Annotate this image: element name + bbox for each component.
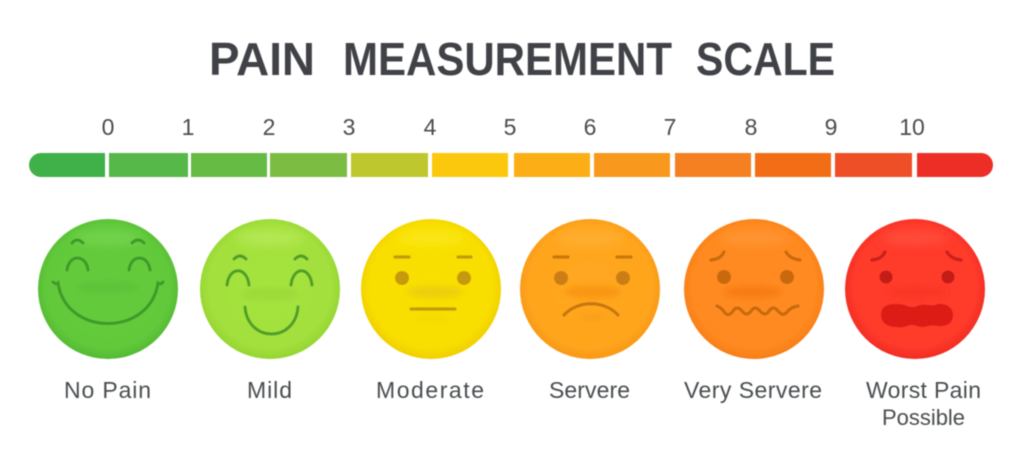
label: mild: Mild [247, 377, 292, 403]
label: no pain: No Pain [64, 377, 151, 403]
face: no pain [38, 219, 178, 359]
title: MEASUREMENT [343, 33, 672, 85]
scale numbers: 8 [745, 114, 757, 140]
face: very severe [684, 219, 824, 359]
scale numbers: 5 [504, 114, 516, 140]
label: severe: Servere [549, 377, 630, 403]
label: worst pain possible: Possible [882, 405, 965, 430]
scale numbers: 1 [182, 114, 194, 140]
label: worst pain possible [866, 377, 981, 430]
title: PAIN [209, 33, 315, 85]
scale numbers: 9 [825, 114, 837, 140]
scale numbers [102, 114, 925, 140]
face: mild [200, 219, 340, 359]
label: very severe: Very Servere [684, 377, 822, 403]
title: SCALE [696, 33, 835, 85]
scale numbers: 2 [263, 114, 275, 140]
face: worst pain [845, 219, 985, 359]
scale numbers: 4 [424, 114, 437, 140]
scale numbers: 7 [664, 114, 676, 140]
scale numbers: 0 [102, 114, 114, 140]
scale numbers: 3 [343, 114, 355, 140]
face: moderate [361, 219, 501, 359]
label: worst pain possible: Worst Pain [866, 377, 981, 403]
scale numbers: 6 [584, 114, 596, 140]
label: moderate: Moderate [376, 377, 484, 403]
pain colour scale bar [29, 153, 993, 177]
scale numbers: 10 [899, 114, 925, 140]
title [209, 33, 835, 85]
face: severe [520, 219, 660, 359]
